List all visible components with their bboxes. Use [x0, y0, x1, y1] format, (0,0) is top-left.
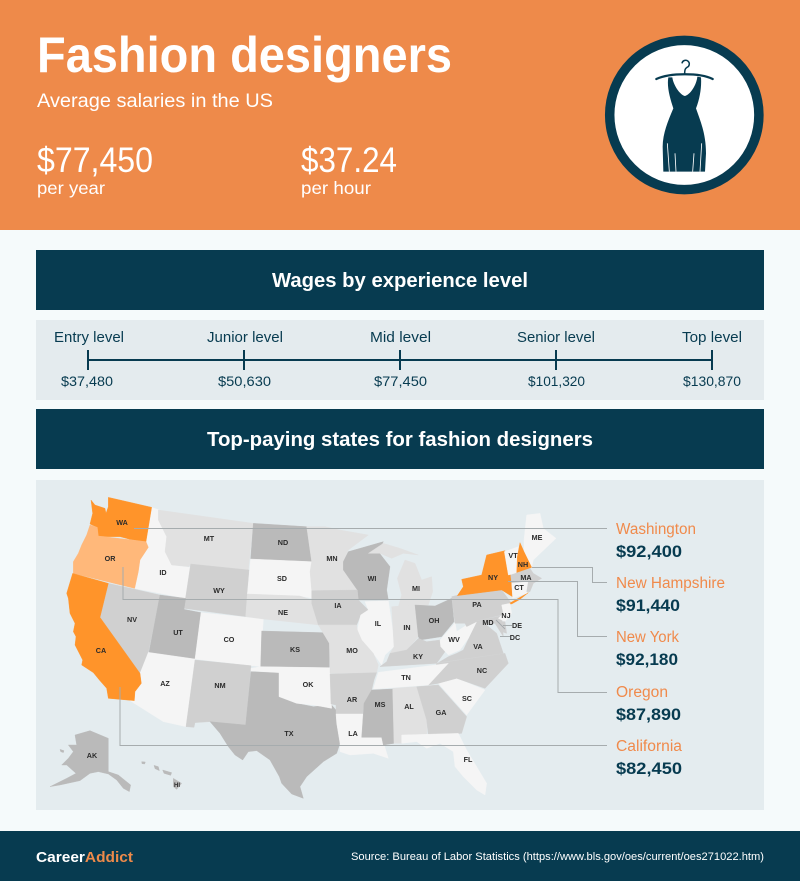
state abbreviations: KY	[413, 652, 423, 661]
panel: wage timeline	[36, 320, 764, 400]
top level: $130,870	[683, 373, 741, 389]
heading: wages by experience level	[36, 250, 764, 310]
senior level	[517, 329, 595, 389]
state salary: Washington: Washington	[616, 521, 696, 538]
mid level: $77,450	[374, 373, 427, 389]
junior level: Junior level	[207, 329, 283, 346]
state abbreviations: MD	[482, 618, 494, 627]
state abbreviations: AZ	[160, 679, 170, 688]
state salary: New Hampshire: New Hampshire	[616, 575, 725, 592]
state salary: Oregon: Oregon	[616, 684, 668, 701]
state salary: Washington	[616, 521, 696, 561]
state abbreviations: MI	[412, 584, 420, 593]
state abbreviations: IA	[334, 601, 342, 610]
state abbreviations: NC	[477, 666, 487, 675]
top level: Top level	[682, 329, 742, 346]
state salary: Oregon	[616, 684, 681, 724]
top level	[682, 329, 742, 389]
state abbreviations: FL	[464, 755, 473, 764]
state abbreviations: DE	[512, 621, 522, 630]
junior level: $50,630	[218, 373, 271, 389]
state abbreviations: OR	[105, 554, 116, 563]
mid level	[370, 329, 431, 389]
panel: map of top-paying states	[36, 480, 764, 810]
hourly salary: per hour	[301, 178, 371, 198]
state abbreviations: MA	[520, 573, 532, 582]
senior level: $101,320	[528, 373, 585, 389]
state salary: New York: New York	[616, 629, 679, 646]
junior level	[207, 329, 283, 389]
state abbreviations: SD	[277, 574, 287, 583]
state abbreviations: IL	[375, 619, 382, 628]
state salary: New Hampshire	[616, 575, 725, 615]
state abbreviations: MN	[326, 554, 338, 563]
state abbreviations: NM	[214, 681, 226, 690]
yearly salary: per year	[37, 178, 105, 198]
heading: top-paying states	[36, 409, 764, 469]
state abbreviations: GA	[436, 708, 446, 717]
state abbreviations: MS	[375, 700, 386, 709]
state abbreviations: HI	[174, 783, 180, 789]
state abbreviations: WA	[116, 518, 128, 527]
timeline axis	[88, 350, 712, 370]
state abbreviations: TX	[284, 729, 294, 738]
state abbreviations: ME	[532, 533, 543, 542]
state abbreviations: UT	[173, 628, 183, 637]
state abbreviations: TN	[401, 673, 411, 682]
state salary: New York	[616, 629, 679, 669]
heading: top-paying states: Top-paying states for fashion designers	[207, 429, 593, 451]
hourly salary	[301, 141, 397, 198]
US map eastern states	[307, 513, 556, 795]
entry level: $37,480	[61, 373, 113, 389]
state abbreviations: AK	[87, 751, 98, 760]
state abbreviations	[87, 518, 543, 789]
state abbreviations: MT	[204, 534, 215, 543]
state abbreviations: DC	[510, 633, 520, 642]
state salary: New York: $92,180	[616, 650, 678, 669]
state abbreviations: VT	[508, 551, 518, 560]
source line: Source: Bureau of Labor Statistics (https://www.bls.gov/oes/current/oes271022.htm)	[351, 851, 764, 863]
header band	[0, 0, 800, 230]
state abbreviations: AL	[404, 702, 414, 711]
state abbreviations: ID	[159, 568, 167, 577]
hourly salary: $37.24	[301, 141, 397, 180]
entry level	[54, 329, 124, 389]
logo: CareerAddict: CareerAddict	[36, 850, 133, 866]
state abbreviations: CA	[96, 646, 106, 655]
state abbreviations: KS	[290, 645, 300, 654]
state abbreviations: PA	[472, 600, 482, 609]
state abbreviations: AR	[347, 695, 358, 704]
state salary: California: California	[616, 738, 682, 755]
state abbreviations: NH	[518, 560, 528, 569]
state abbreviations: VA	[473, 642, 483, 651]
state abbreviations: OK	[303, 680, 314, 689]
state abbreviations: MO	[346, 646, 358, 655]
yearly salary	[37, 141, 153, 198]
heading: wages by experience level: Wages by experience level	[272, 270, 528, 292]
state abbreviations: OH	[429, 616, 439, 625]
state abbreviations: ND	[278, 538, 288, 547]
entry level: Entry level	[54, 329, 124, 346]
icon: dress on hanger	[610, 40, 759, 190]
state salary: Oregon: $87,890	[616, 705, 681, 724]
footer	[0, 831, 800, 881]
callout leader lines	[120, 528, 607, 746]
state abbreviations: NV	[127, 615, 137, 624]
mid level: Mid level	[370, 329, 431, 346]
subtitle: Average salaries in the US	[37, 91, 273, 112]
state abbreviations: WI	[368, 574, 376, 583]
senior level: Senior level	[517, 329, 595, 346]
state abbreviations: LA	[348, 729, 358, 738]
state abbreviations: SC	[462, 694, 472, 703]
state salary: California: $82,450	[616, 759, 682, 778]
state abbreviations: NY	[488, 573, 498, 582]
state abbreviations: WY	[213, 586, 225, 595]
US map western states	[50, 497, 340, 798]
state abbreviations: NJ	[501, 611, 511, 620]
state salary: Washington: $92,400	[616, 542, 682, 561]
state abbreviations: CT	[514, 583, 524, 592]
state abbreviations: NE	[278, 608, 288, 617]
state abbreviations: CO	[224, 635, 235, 644]
yearly salary: $77,450	[37, 141, 153, 180]
state abbreviations: IN	[403, 623, 411, 632]
state abbreviations: WV	[448, 635, 460, 644]
state salary: California	[616, 738, 682, 778]
state salary: New Hampshire: $91,440	[616, 596, 680, 615]
title: Fashion designers	[37, 27, 452, 83]
